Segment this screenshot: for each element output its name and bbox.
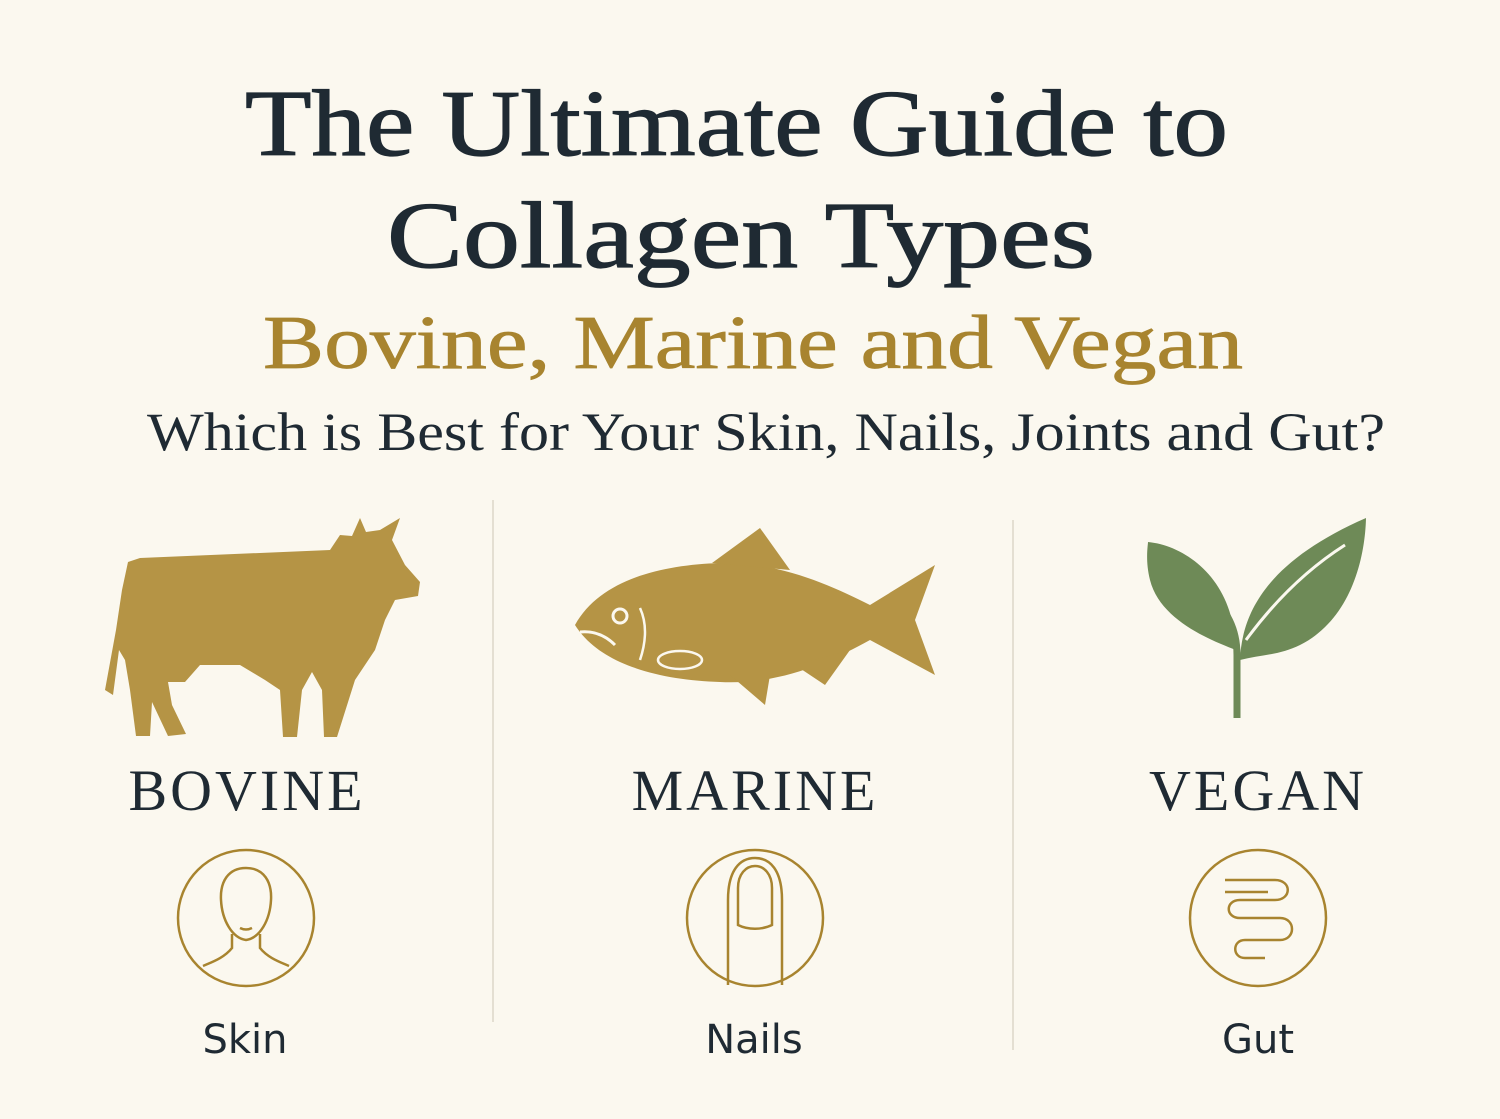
panel: marine (575, 528, 935, 1063)
title: The Ultimate Guide to (245, 72, 1228, 176)
icon: gut (1190, 850, 1326, 986)
label: vegan: VEGAN (1149, 758, 1367, 823)
icon: leaves (1147, 518, 1366, 718)
subtitle: Bovine, Marine and Vegan (263, 301, 1243, 385)
icon: skin (178, 850, 314, 986)
icon: nail (687, 850, 823, 986)
icon: cow (105, 518, 420, 737)
label: bovine: BOVINE (128, 758, 366, 823)
label: marine: MARINE (632, 758, 878, 823)
caption: gut: Gut (1222, 1017, 1294, 1063)
title: Collagen Types (387, 184, 1095, 288)
caption: skin: Skin (202, 1017, 288, 1063)
panel: vegan (1147, 518, 1367, 1063)
panel: bovine (105, 518, 420, 1063)
title (245, 72, 1228, 288)
question: Which is Best for Your Skin, Nails, Joints and Gut? (147, 402, 1385, 462)
caption: nails: Nails (705, 1017, 803, 1063)
icon: fish (575, 528, 935, 705)
